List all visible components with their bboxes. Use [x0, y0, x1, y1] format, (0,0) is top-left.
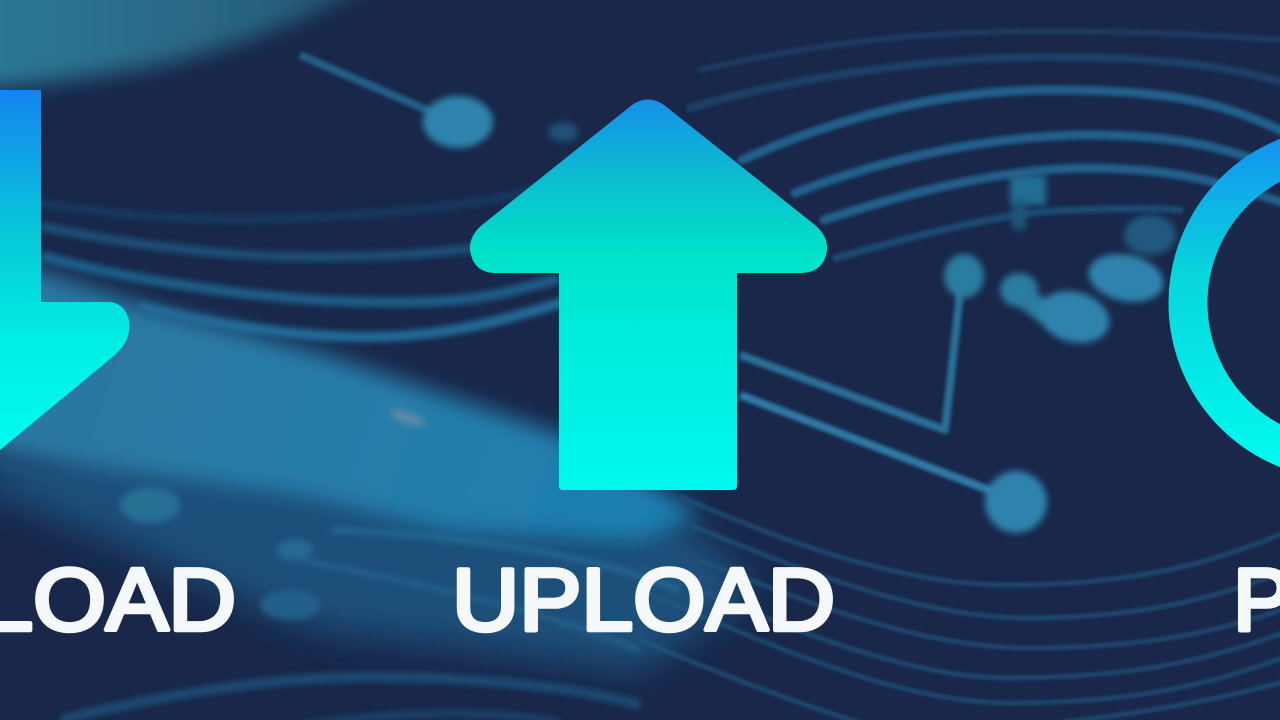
lower right fine wave lines [640, 497, 1280, 720]
bright band bottom left [0, 245, 700, 540]
label: upload: UPLOAD [452, 550, 835, 649]
blurred light band top left [0, 0, 440, 92]
bottom curved lines [61, 677, 640, 720]
wide lower streak band [0, 420, 760, 670]
blurred specks [120, 406, 427, 620]
circuit traces [300, 55, 1015, 500]
left curved lines [41, 180, 570, 337]
streak highlights [0, 465, 680, 650]
icon: ping ring [1188, 146, 1280, 460]
circuit nodes [423, 96, 1176, 533]
icon: download arrow [0, 90, 129, 450]
upper right curved lines [690, 31, 1280, 258]
icon: upload arrow [470, 100, 827, 490]
